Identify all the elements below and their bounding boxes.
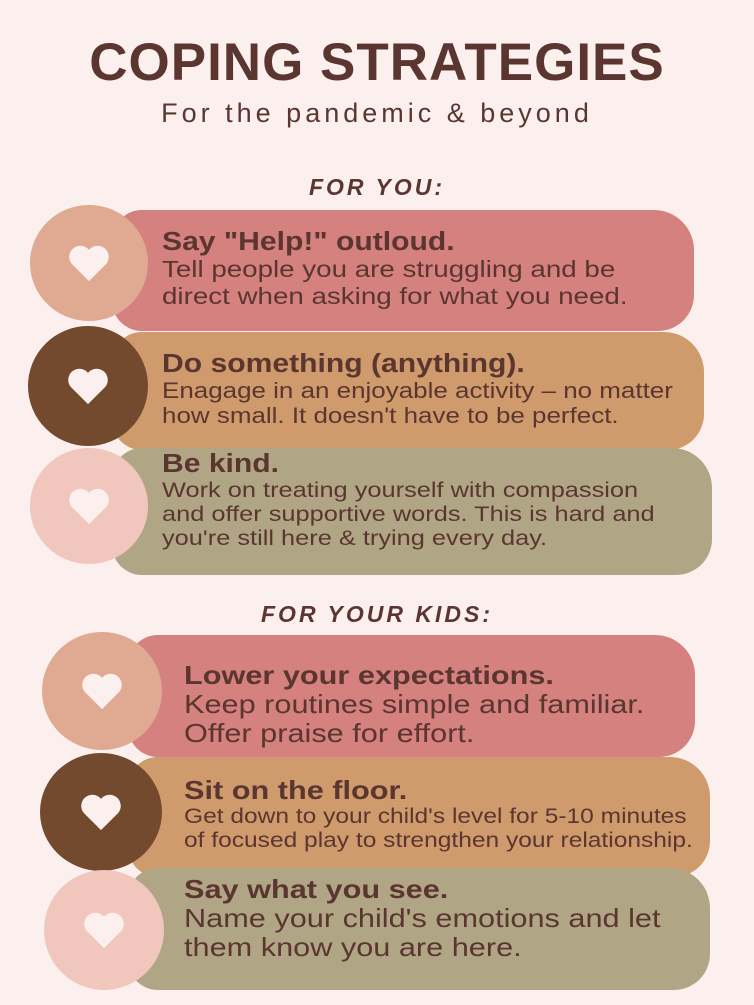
text 1: direct when asking for what you need. — [162, 283, 628, 309]
text 5: Sit on the floor. — [184, 775, 407, 805]
heading: for your kids: FOR YOUR KIDS: — [261, 601, 493, 627]
text 2: how small. It doesn't have to be perfect. — [162, 403, 619, 428]
text 3: Work on treating yourself with compassion — [162, 478, 638, 502]
title: COPING STRATEGIES — [89, 33, 665, 92]
text 6: Say what you see. — [184, 874, 448, 904]
text 3: you're still here & trying every day. — [162, 526, 547, 550]
text 6: Name your child's emotions and let — [184, 903, 661, 933]
bar 6 — [128, 868, 710, 990]
icon circle 6 — [44, 870, 164, 990]
text 2 — [162, 350, 673, 428]
text 6: them know you are here. — [184, 932, 522, 962]
text 3 — [162, 450, 655, 550]
text 4: Lower your expectations. — [184, 660, 554, 690]
bar 5 — [128, 757, 710, 877]
text 5: of focused play to strengthen your relationship. — [184, 829, 693, 852]
icon circle 4 — [42, 632, 162, 750]
icon circle 1 — [30, 205, 148, 321]
icon circle 2 — [28, 326, 148, 446]
text 3: Be kind. — [162, 450, 279, 478]
text 2: Do something (anything). — [162, 350, 525, 378]
bar 2 — [112, 332, 704, 450]
text 2: Enagage in an enjoyable activity – no matter — [162, 378, 673, 403]
heading: for you: FOR YOU: — [309, 174, 445, 200]
icon circle 5 — [40, 753, 162, 871]
bar 4 — [128, 635, 695, 757]
text 6 — [184, 874, 661, 962]
icon circle 3 — [30, 448, 148, 564]
text 4: Offer praise for effort. — [184, 718, 474, 748]
text 5: Get down to your child's level for 5-10 minutes — [184, 805, 687, 828]
text 1: Say "Help!" outloud. — [162, 228, 455, 256]
text 4 — [184, 660, 644, 748]
text 5 — [184, 775, 693, 852]
subtitle: For the pandemic & beyond — [161, 98, 593, 128]
bar 3 — [112, 448, 712, 575]
text 1 — [162, 228, 628, 309]
text 3: and offer supportive words. This is hard and — [162, 502, 655, 526]
bar 1 — [112, 210, 694, 331]
text 1: Tell people you are struggling and be — [162, 256, 615, 282]
text 4: Keep routines simple and familiar. — [184, 689, 644, 719]
